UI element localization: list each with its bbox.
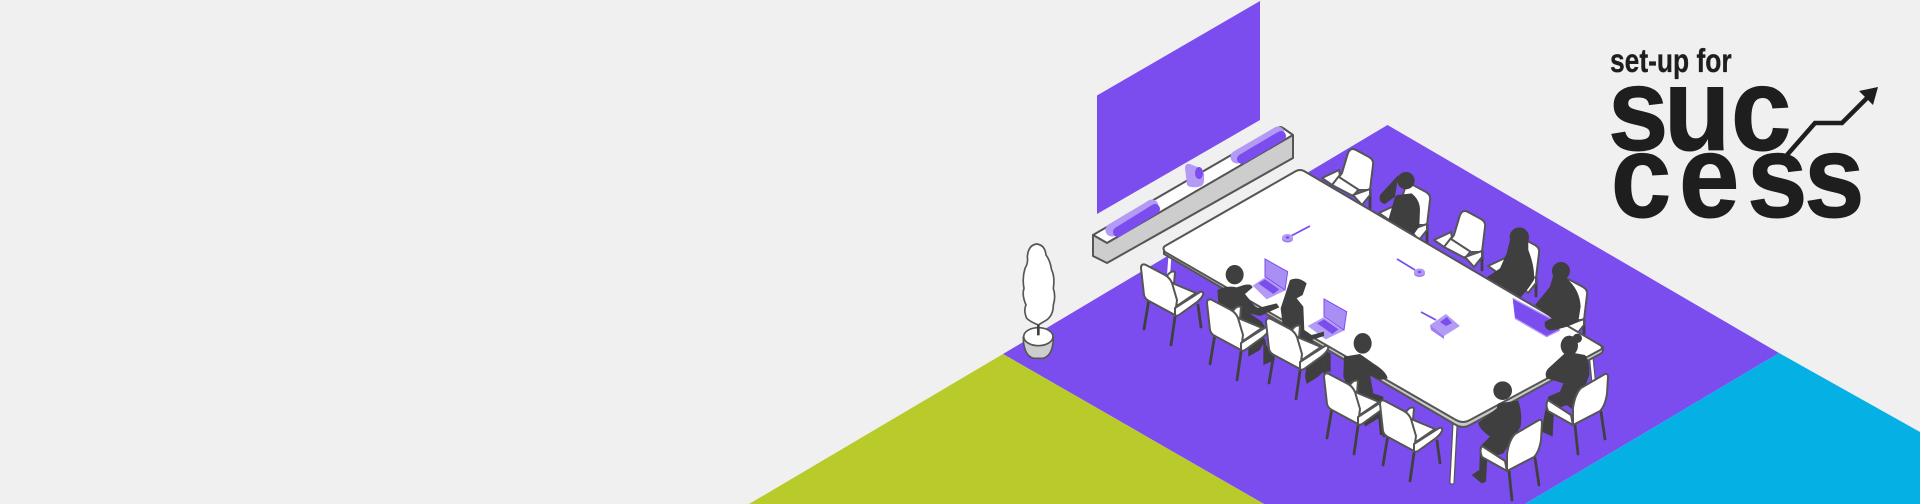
plant foliage [1023, 244, 1055, 325]
near-side chair 4 [1324, 373, 1386, 454]
plant pot [1023, 337, 1053, 358]
logo word: suc: suc [1608, 44, 1791, 176]
man at laptop 1 [1217, 265, 1279, 365]
floor: green wedge [749, 354, 1264, 504]
far-side chair 4 [1488, 237, 1539, 296]
woman at laptop 2 [1281, 279, 1331, 384]
near-side chair 5 [1380, 400, 1442, 481]
man, near corner [1472, 381, 1521, 483]
laptop 1 [1253, 259, 1288, 299]
person on phone [1380, 172, 1420, 235]
laptop 2 [1308, 299, 1347, 339]
conference table [1164, 170, 1603, 427]
right table leg [1591, 355, 1594, 385]
near-side chair 7 [1546, 374, 1608, 454]
table edge [1164, 175, 1603, 427]
right soundbar [1237, 133, 1281, 159]
table microphone 2 [1397, 259, 1425, 277]
near-side chair 1 [1141, 264, 1203, 345]
man with laptop, far side [1535, 262, 1581, 331]
logo tagline: set-up for [1610, 43, 1732, 80]
table microphone 1 [1282, 226, 1310, 242]
logo rising arrow [1787, 87, 1878, 155]
laptop 3 [1513, 298, 1560, 337]
near-side chair 6 [1480, 420, 1542, 500]
logo: set-up for success [1608, 43, 1878, 243]
seated woman, far side [1487, 227, 1534, 298]
table top [1164, 170, 1602, 422]
left soundbar [1112, 206, 1155, 232]
shelf top face [1093, 127, 1293, 243]
left table leg [1168, 255, 1170, 282]
floor: blue wedge [1525, 353, 1920, 504]
far-side chair 1 [1322, 149, 1373, 208]
camera [1185, 164, 1204, 187]
display screen [1097, 1, 1260, 214]
near-side chair 2 [1207, 299, 1269, 380]
front table leg [1452, 425, 1455, 482]
pot rim [1024, 328, 1053, 346]
far-side chair 5 [1536, 279, 1587, 338]
near-side chair 3 [1266, 318, 1328, 399]
man at table centre [1343, 333, 1388, 435]
floor: purple carpet [1003, 125, 1779, 504]
far-side chair 2 [1379, 184, 1430, 243]
plant [1023, 244, 1055, 358]
shelf front face [1093, 135, 1293, 263]
conference phone [1421, 312, 1460, 339]
plant stem [1034, 325, 1042, 335]
media console shelf [1093, 127, 1293, 263]
far-side chair 3 [1434, 211, 1485, 270]
woman with hair bun [1542, 334, 1589, 437]
logo word: cess: cess [1611, 111, 1864, 243]
